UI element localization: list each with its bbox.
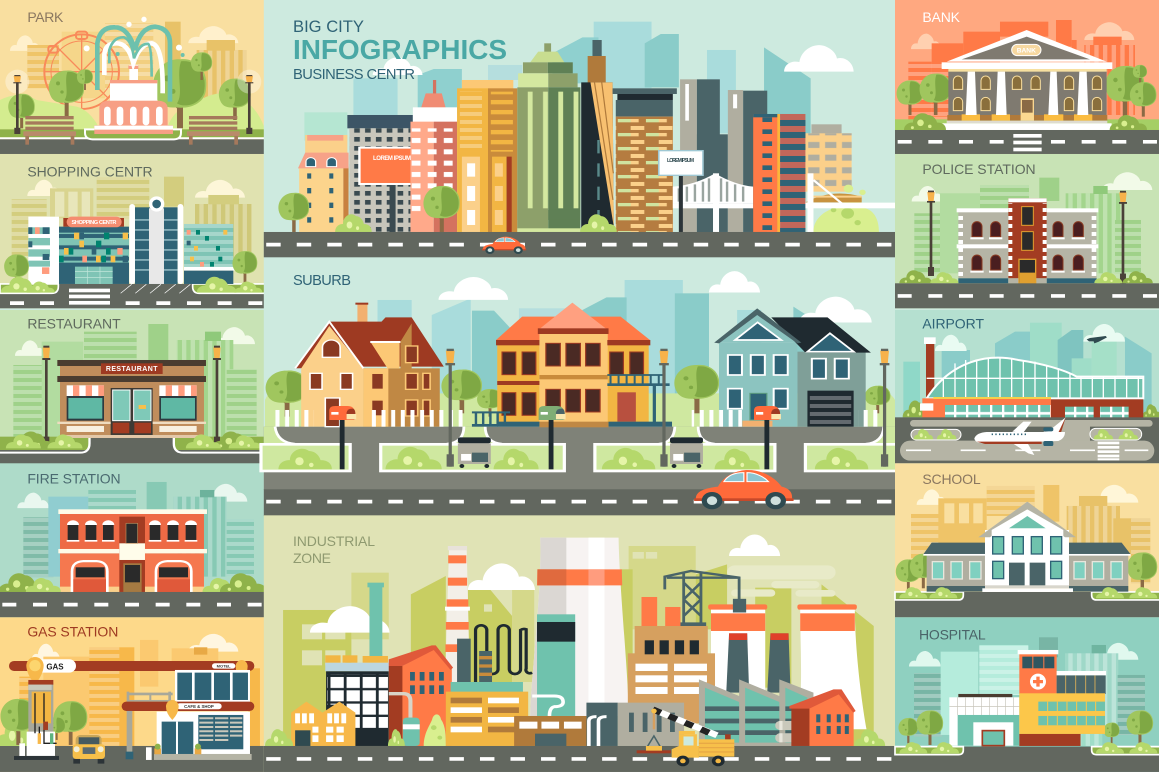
benches [23, 116, 240, 145]
bushes [903, 401, 1159, 417]
restaurant building [57, 360, 206, 438]
label: school: SCHOOL [922, 471, 981, 487]
crane truck [637, 709, 734, 766]
terminal [920, 337, 1143, 420]
street lamps [445, 349, 889, 467]
panel: bank [895, 0, 1159, 154]
sawtooth factory [699, 679, 813, 746]
red house [389, 645, 453, 746]
smoke [727, 565, 836, 597]
tan factory [628, 597, 715, 723]
taxi [73, 735, 105, 764]
tarmac and runway [895, 417, 1159, 463]
trees [0, 699, 87, 746]
canopy and sign bars [9, 657, 254, 685]
trees [899, 710, 1153, 745]
label: gas station: GAS STATION [27, 624, 118, 640]
billboard text: LOREM IPSUM [373, 156, 411, 162]
fountain [84, 17, 185, 134]
road markings [898, 134, 1157, 151]
tower: grid office [347, 115, 413, 232]
street and lawns [261, 427, 898, 516]
trees [897, 65, 1157, 117]
grey buildings [586, 703, 684, 746]
yellow factory with black grid [325, 655, 390, 746]
red house right [789, 689, 856, 746]
tower: red [753, 114, 805, 232]
panel: gas station [0, 617, 265, 772]
road [264, 746, 896, 772]
panel: industrial zone [264, 515, 896, 772]
panel: school [895, 463, 1159, 617]
billboard text: LOREM IPSUM [667, 158, 694, 164]
label: restaurant: RESTAURANT [27, 316, 121, 332]
bushes [904, 113, 1147, 130]
white fences [274, 410, 882, 427]
police station building [957, 198, 1098, 283]
trees [266, 365, 890, 417]
bank building: BANK [1017, 47, 1036, 54]
panel: fire station [0, 463, 267, 618]
title block: BUSINESS CENTR [293, 67, 415, 83]
cable bridge [805, 173, 896, 232]
tower: green [517, 43, 580, 232]
tower: brick [613, 88, 677, 232]
small yellow houses [291, 702, 355, 746]
panel: restaurant [0, 310, 265, 463]
label: industrial zone: INDUSTRIAL [293, 533, 375, 549]
towers: grey pair [680, 79, 767, 232]
tower: dark glass [581, 40, 614, 232]
motel and cafe building: CAFE & SHOP [184, 704, 214, 709]
trees [8, 52, 251, 128]
teal chimney [367, 583, 384, 657]
bushes [278, 447, 868, 469]
gas pump [14, 680, 59, 760]
label: hospital: HOSPITAL [919, 626, 986, 642]
trees and bushes [1, 251, 262, 293]
lamps [5, 70, 261, 134]
label: fire station: FIRE STATION [27, 470, 121, 486]
bushes [0, 573, 267, 592]
cooling tower: large [530, 538, 629, 716]
house: brick [295, 303, 444, 427]
label: industrial zone: ZONE [293, 550, 331, 566]
bridge [673, 173, 753, 232]
trees and bushes [278, 186, 617, 232]
tank and bushes [265, 714, 885, 746]
restaurant building: RESTAURANT [106, 366, 158, 373]
road [0, 592, 265, 617]
fire station building [58, 509, 207, 592]
panel: park [0, 0, 265, 154]
mailboxes [329, 406, 781, 469]
canopy and sign bars: GAS [46, 662, 64, 671]
bushes [899, 587, 1157, 598]
tower: orange [457, 80, 517, 232]
stack and yellow block [446, 651, 563, 746]
title block [293, 17, 507, 83]
ferris wheel [44, 32, 119, 109]
label: suburb: SUBURB [293, 273, 351, 289]
road [0, 129, 265, 154]
car [694, 470, 794, 509]
trash bins [458, 437, 703, 468]
airplane [974, 417, 1066, 455]
billboard text [373, 156, 694, 164]
crosswalk and road markings [10, 284, 262, 305]
teal tower [537, 614, 575, 716]
label: airport: AIRPORT [922, 315, 984, 331]
bank building [942, 30, 1112, 130]
tower: small mansard [298, 135, 349, 232]
trees [896, 552, 1157, 592]
lamps and bushes [899, 191, 1153, 283]
coil pipe [476, 625, 532, 682]
canopy and sign bars: MOTEL [217, 664, 231, 669]
panel: airport [895, 310, 1159, 463]
small plane [1087, 336, 1107, 343]
hospital building [949, 650, 1106, 746]
road [895, 747, 1159, 772]
panel: police station [895, 154, 1159, 308]
house: orange [472, 303, 672, 427]
bushes [899, 742, 1157, 753]
title block: INFOGRAPHICS [293, 34, 507, 65]
title block: BIG CITY [293, 17, 364, 36]
road [895, 283, 1159, 308]
billboard: left [358, 147, 414, 232]
label: police station: POLICE STATION [922, 161, 1036, 177]
shopping mall building [28, 196, 235, 284]
label: industrial zone [293, 533, 375, 566]
road [895, 592, 1159, 617]
label: shopping centre: SHOPPING CENTR [27, 164, 153, 180]
panel: shopping centre [0, 154, 265, 308]
tower: tan [805, 124, 852, 192]
panel: big city [264, 0, 896, 258]
striped chimney [445, 546, 470, 683]
panel: hospital [895, 617, 1159, 772]
panel: suburb [261, 258, 898, 516]
road [264, 232, 896, 257]
lamps and bushes [6, 346, 261, 448]
cooling towers: right [708, 604, 866, 729]
crane [665, 571, 745, 624]
label: bank: BANK [922, 9, 961, 25]
school building [923, 502, 1131, 592]
pipes stack [775, 721, 803, 742]
brown block [514, 716, 586, 746]
billboard: right [658, 150, 704, 232]
car [482, 237, 526, 254]
label: park: PARK [27, 9, 64, 25]
tower: pink [410, 80, 457, 232]
shopping mall building: SHOPPING CENTR [71, 220, 116, 226]
motel and cafe building [122, 670, 254, 760]
house: teal [714, 308, 871, 427]
